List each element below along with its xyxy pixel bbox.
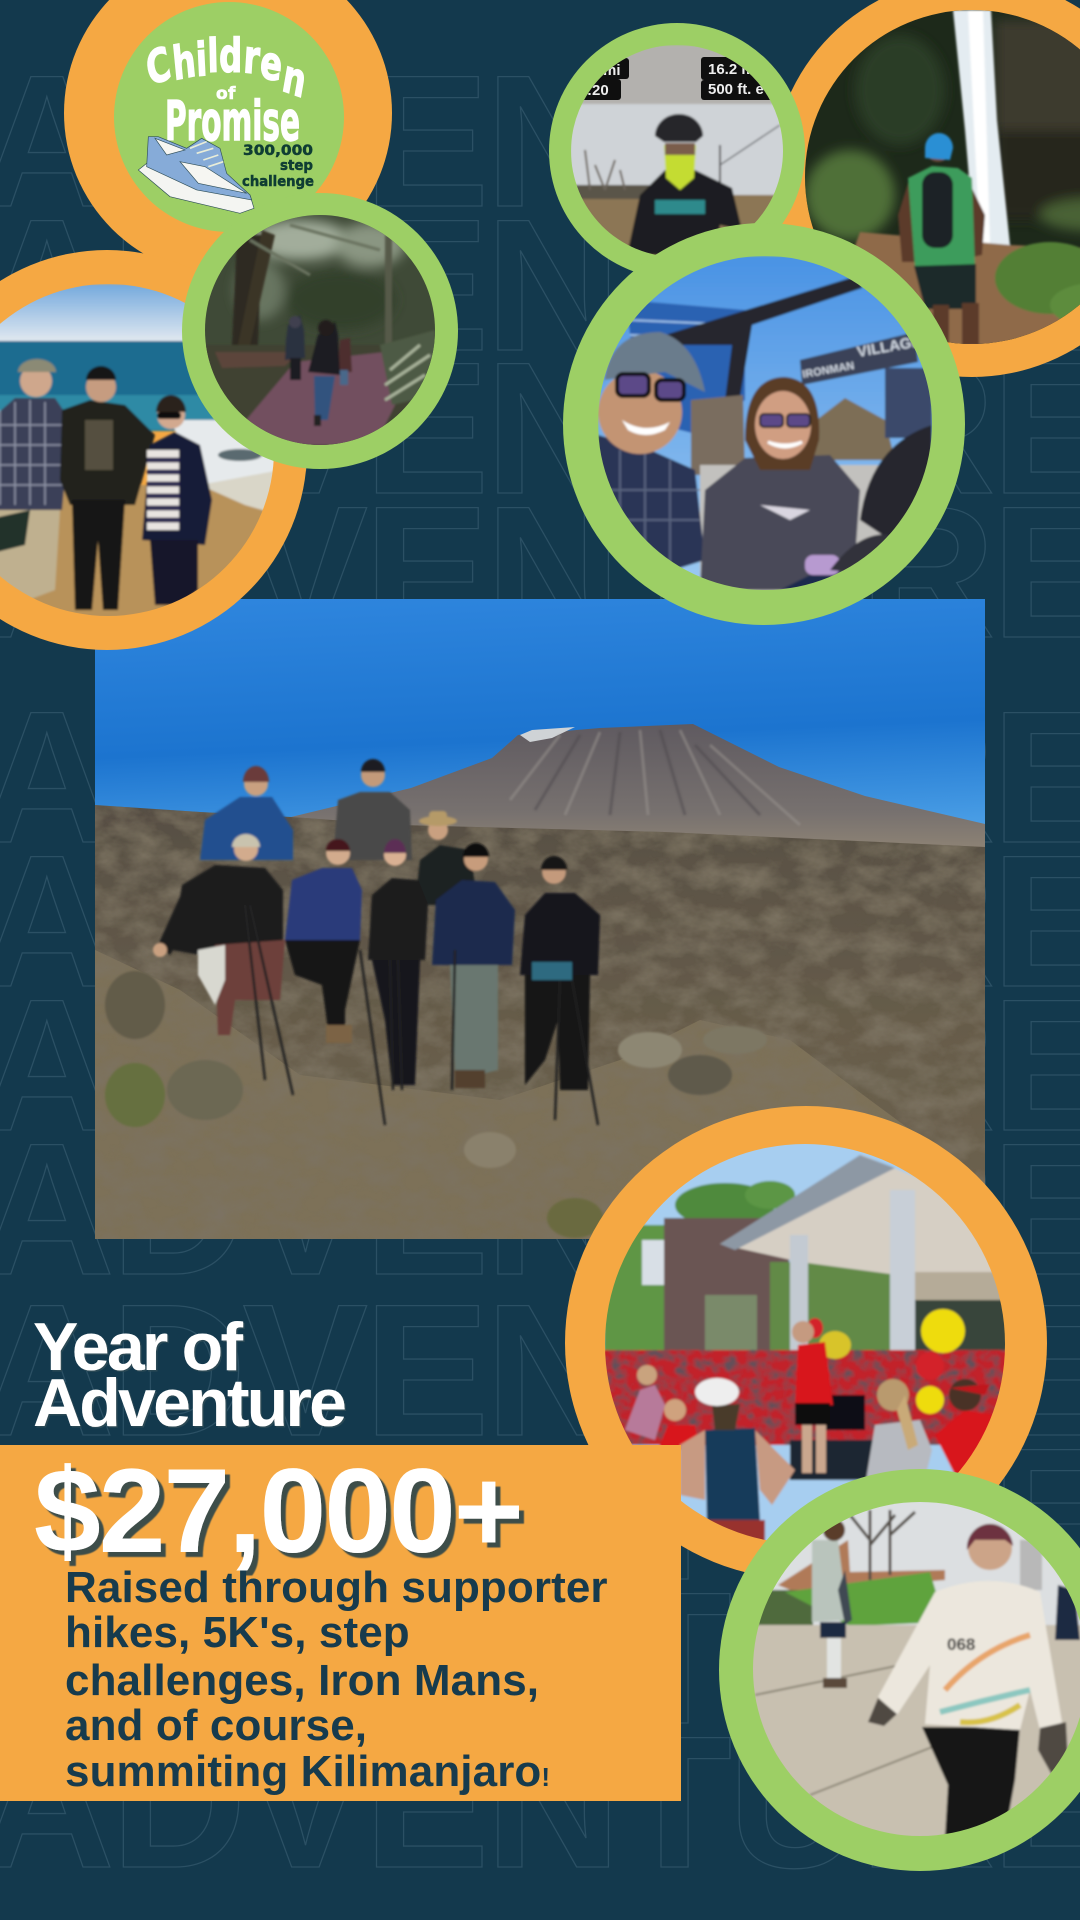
- photo: [750, 1500, 1080, 1840]
- trekking poles: [247, 940, 600, 1126]
- hiker: grey top: [333, 759, 412, 860]
- woman in stripes: [142, 395, 212, 605]
- green ring: [182, 193, 458, 469]
- photo: [560, 45, 786, 260]
- stats overlays: [584, 57, 770, 100]
- logo wordmark: of: [216, 84, 236, 104]
- photo: [205, 215, 435, 450]
- stats overlays: :20: [587, 82, 609, 99]
- body text: Raised through supporter: [65, 1563, 608, 1612]
- crowd member: floral top: [625, 1365, 665, 1440]
- hiker: grey pants: [432, 843, 515, 1088]
- stats overlays: mi: [603, 62, 621, 79]
- heading: Year of Adventure: [33, 1309, 345, 1441]
- logo tagline: [242, 143, 314, 190]
- logo wordmark: Children: [142, 30, 310, 109]
- green logo disc: [114, 2, 344, 232]
- hiker: black jacket: [520, 856, 600, 1090]
- logo tagline: challenge: [242, 174, 314, 190]
- photo: VILLAGE: [856, 333, 923, 361]
- walking woman: 068: [947, 1635, 975, 1654]
- woman with glasses: [700, 377, 860, 590]
- hiker far: [285, 315, 305, 380]
- hiker: woman in black: [368, 839, 428, 1085]
- hiker: front left, maroon pants: [153, 834, 285, 1035]
- man in red: [935, 1379, 1005, 1485]
- hiker: blue jacket: [200, 766, 293, 860]
- body text: [65, 1563, 608, 1796]
- panel: forest trail photo: [182, 193, 458, 469]
- walking woman: [868, 1524, 1068, 1837]
- logo: Children of Promise: [138, 30, 314, 213]
- hiker centre: [308, 320, 340, 426]
- man in plaid: [0, 359, 70, 605]
- panel: waterfall photo: [772, 0, 1080, 377]
- photo: IRONMAN: [801, 360, 855, 381]
- green ring: [719, 1469, 1080, 1871]
- body text: hikes, 5K's, step: [65, 1608, 410, 1657]
- body text: and of course,: [65, 1701, 367, 1750]
- photo: [0, 284, 280, 620]
- cyclist: [627, 114, 742, 255]
- green ring: [563, 223, 965, 625]
- far runner: [1055, 1585, 1080, 1640]
- panel: 5K event photo: [565, 1106, 1047, 1580]
- speaker in red: [788, 1320, 874, 1482]
- panel: beach photo: [0, 250, 307, 650]
- body text: summiting Kilimanjaro!: [65, 1747, 550, 1796]
- stroller: [830, 425, 932, 575]
- child in jacket: [812, 1519, 852, 1688]
- orange circle behind logo: [64, 0, 392, 277]
- logo wordmark: [142, 30, 310, 153]
- photo: [600, 1140, 1010, 1550]
- photo: [598, 256, 933, 595]
- orange ring: [0, 250, 307, 650]
- body text: challenges, Iron Mans,: [65, 1656, 539, 1705]
- hiker: navy jacket: [285, 839, 362, 1043]
- icon: sneaker: [138, 137, 254, 213]
- orange ring: [772, 0, 1080, 377]
- panel: Ironman village selfie photo: [563, 223, 965, 625]
- panel: cyclist photo: [549, 23, 805, 279]
- orange ring: [565, 1106, 1047, 1580]
- man in black: [60, 366, 155, 610]
- big number: $27,000+: [34, 1444, 522, 1578]
- woman with ponytail: [866, 1379, 932, 1480]
- heading: Year of Adventure: Year of: [33, 1309, 243, 1385]
- photo: [805, 10, 1080, 350]
- stats overlays: 16.2 mi: [708, 61, 759, 78]
- balloons: [807, 1309, 965, 1414]
- logo tagline: step: [280, 158, 313, 174]
- woman in tank top: [680, 1378, 795, 1550]
- panel: orange statistic block: [0, 1445, 681, 1801]
- logo tagline: 300,000: [243, 143, 313, 159]
- stats overlays: 500 ft. e: [708, 81, 764, 98]
- man at falls: [898, 133, 985, 345]
- hikers group: [153, 759, 600, 1125]
- heading: Year of Adventure: Adventure: [33, 1365, 345, 1441]
- hiker: sun hat: [415, 811, 478, 905]
- green ring: [549, 23, 805, 279]
- panel: colour-run walker photo: [719, 1469, 1080, 1871]
- hiker side: [338, 338, 352, 385]
- hero photo: team below Kilimanjaro: [95, 599, 985, 1239]
- crowd member: child: [658, 1399, 700, 1450]
- logo wordmark: Promise: [165, 90, 300, 153]
- man with cap: [598, 332, 705, 590]
